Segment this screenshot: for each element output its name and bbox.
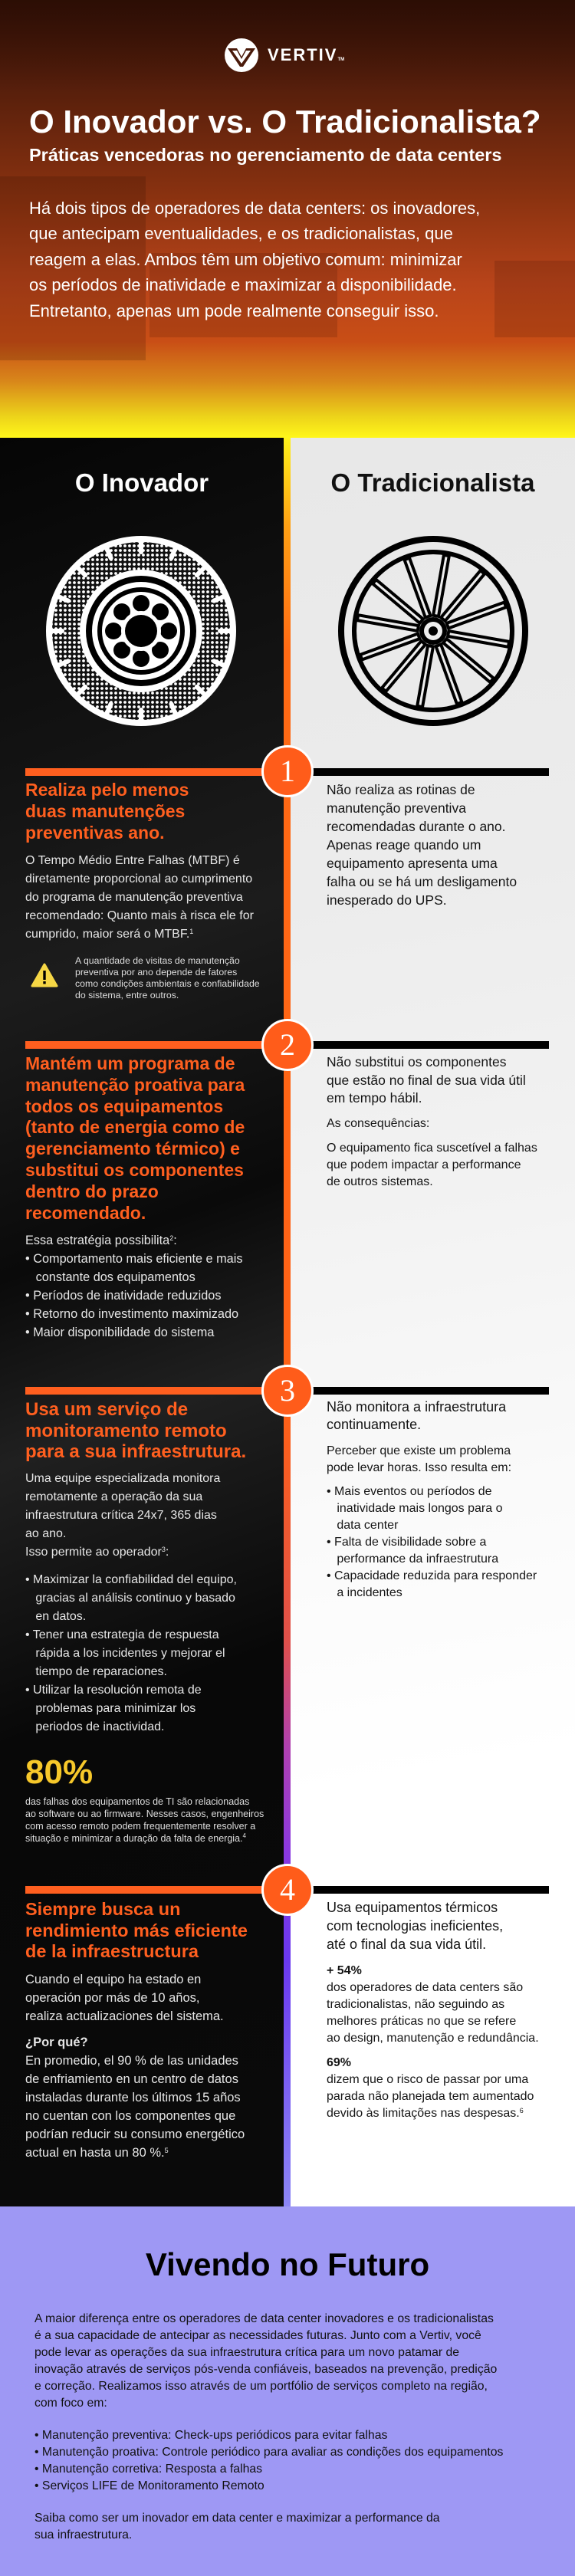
traditionalist text 1 <box>327 782 517 908</box>
heading: O Inovador: O Inovador <box>75 468 209 497</box>
server racks silhouettes <box>0 176 146 360</box>
stat text: ao software ou ao firmware. Nesses casos, engenheiros <box>25 1809 264 1819</box>
traditionalist text 2: O equipamento fica suscetível a falhas <box>327 1142 537 1155</box>
innovator text 2: constante dos equipamentos <box>36 1270 196 1284</box>
traditionalist stats 4: parada não planejada tem aumentado <box>327 2090 534 2103</box>
number badge 2 <box>261 1019 314 1071</box>
traditionalist heading 2: Não substitui os componentes <box>327 1054 506 1070</box>
innovator text 4: realiza actualizaciones del sistema. <box>25 2009 224 2023</box>
traditionalist bullets 3: inatividade mais longos para o <box>337 1502 502 1515</box>
traditionalist stats 4 <box>327 1964 539 2120</box>
innovator why text: ¿Por qué? <box>25 2036 88 2049</box>
innovator why text: no cuentan con los componentes que <box>25 2109 235 2123</box>
traditionalist text 1: equipamento apresenta uma <box>327 856 498 871</box>
innovator text 3: Isso permite ao operador3: <box>25 1546 169 1559</box>
traditionalist heading 3 <box>327 1399 506 1432</box>
traditionalist text 2 <box>327 1117 537 1188</box>
title: O Inovador vs. O Tradicionalista? <box>29 104 541 140</box>
logo: Vertiv <box>225 38 344 72</box>
traditionalist heading 4 <box>327 1900 503 1952</box>
innovator text 1: recomendado: Quanto mais à risca ele for <box>25 909 254 922</box>
warning note: preventiva por ano depende de fatores <box>75 967 237 978</box>
traditionalist bullets 3: • Capacidade reduzida para responder <box>327 1569 537 1582</box>
intro text <box>29 199 480 320</box>
innovator heading 4: de la infraestructura <box>25 1941 199 1961</box>
innovator heading 3: monitoramento remoto <box>25 1420 227 1441</box>
future paragraph: pode levar as operações da sua infraestrutura crítica para um novo patamar de <box>34 2346 459 2359</box>
traditionalist text 2: As consequências: <box>327 1117 429 1130</box>
innovator bullets 3 <box>25 1573 237 1733</box>
black rule 4 <box>307 1886 549 1894</box>
section 2 <box>25 1019 549 1071</box>
innovator text 3: infraestrutura crítica 24x7, 365 dias <box>25 1509 217 1522</box>
innovator why text: podrían reducir su consumo energético <box>25 2128 245 2141</box>
panel: traditionalist column background <box>291 438 575 2206</box>
number badge 4: 4 <box>280 1872 295 1907</box>
intro text: que antecipam eventualidades, e os tradicionalistas, que <box>29 224 453 243</box>
innovator text 1: diretamente proporcional ao cumprimento <box>25 872 252 886</box>
traditionalist heading 3: Não monitora a infraestrutura <box>327 1399 506 1414</box>
section 3 <box>25 1365 549 1417</box>
header background <box>0 0 575 438</box>
logo: Vertiv: VERTIVTM <box>268 45 344 64</box>
warning note: como condições ambientais e confiabilidade <box>75 978 260 989</box>
traditionalist heading 3: continuamente. <box>327 1417 421 1432</box>
traditionalist heading 2 <box>327 1054 526 1106</box>
innovator heading 4: rendimiento más eficiente <box>25 1920 248 1940</box>
intro text: Entretanto, apenas um pode realmente conseguir isso. <box>29 301 439 320</box>
warning note: A quantidade de visitas de manutenção <box>75 955 240 966</box>
black rule 3 <box>307 1387 549 1395</box>
innovator why text: de enfriamiento en un centro de datos <box>25 2072 238 2086</box>
innovator text 2 <box>25 1234 242 1339</box>
innovator text 2: • Retorno do investimento maximizado <box>25 1307 238 1321</box>
stat: 80%: 80% <box>25 1753 93 1791</box>
stat text: das falhas dos equipamentos de TI são relacionadas <box>25 1796 249 1807</box>
future bullets: • Manutenção proativa: Controle periódico para avaliar as condições dos equipamentos <box>34 2446 503 2459</box>
innovator heading 2: todos os equipamentos <box>25 1096 223 1116</box>
innovator bullets 3: en datos. <box>35 1610 86 1623</box>
traditionalist bullets 3 <box>327 1485 537 1599</box>
innovator bullets 3: • Maximizar la confiabilidad del equipo, <box>25 1573 237 1586</box>
heading: Vivendo no Futuro: Vivendo no Futuro <box>146 2246 429 2282</box>
traditionalist text 1: falha ou se há um desligamento <box>327 874 517 889</box>
traditionalist bullets 3: data center <box>337 1519 398 1532</box>
traditionalist stats 4: ao design, manutenção e redundância. <box>327 2032 539 2045</box>
innovator heading 2: recomendado. <box>25 1203 146 1223</box>
innovator heading 2: substitui os componentes <box>25 1160 244 1180</box>
innovator text 1 <box>25 854 254 941</box>
innovator heading 1: Realiza pelo menos <box>25 780 189 800</box>
innovator bullets 3: tiempo de reparaciones. <box>35 1665 167 1678</box>
icon: warning <box>31 963 58 987</box>
traditionalist text 3: Perceber que existe um problema <box>327 1444 511 1457</box>
number badge 4 <box>261 1864 314 1916</box>
warning note <box>75 955 260 1001</box>
innovator heading 3 <box>25 1399 246 1462</box>
closing text: Saiba como ser um inovador em data center e maximizar a performance da <box>34 2512 440 2525</box>
heading: O Tradicionalista: O Tradicionalista <box>331 468 534 497</box>
stat text: situação e minimizar a duração da falta de energia.4 <box>25 1832 246 1844</box>
innovator heading 2: dentro do prazo <box>25 1181 159 1201</box>
number badge 3 <box>261 1365 314 1417</box>
icon: modern tire <box>46 536 236 726</box>
innovator text 1: cumprido, maior será o MTBF.1 <box>25 928 193 941</box>
future paragraph: inovação através de serviços pós-venda confiáveis, baseados na prevenção, predição <box>34 2363 497 2376</box>
innovator text 3: remotamente a operação da sua <box>25 1490 202 1503</box>
innovator bullets 3: • Tener una estrategia de respuesta <box>25 1628 219 1641</box>
traditionalist text 1: inesperado do UPS. <box>327 892 447 908</box>
traditionalist stats 4: dos operadores de data centers são <box>327 1981 523 1994</box>
traditionalist heading 2: em tempo hábil. <box>327 1090 422 1106</box>
traditionalist text 3 <box>327 1444 511 1474</box>
innovator bullets 3: rápida a los incidentes y mejorar el <box>35 1647 225 1660</box>
subtitle: Práticas vencedoras no gerenciamento de data centers <box>29 145 501 165</box>
innovator text 4: operación por más de 10 años, <box>25 1991 199 2005</box>
traditionalist text 3: pode levar horas. Isso resulta em: <box>327 1461 511 1474</box>
future bullets: • Manutenção preventiva: Check-ups periódicos para evitar falhas <box>34 2429 387 2442</box>
orange rule 4 <box>25 1886 271 1894</box>
future bullets: • Manutenção corretiva: Resposta a falhas <box>34 2463 262 2476</box>
innovator heading 4 <box>25 1899 248 1961</box>
innovator text 2: • Maior disponibilidade do sistema <box>25 1326 214 1339</box>
innovator text 4 <box>25 1973 224 2023</box>
divider stripe <box>284 438 291 2206</box>
innovator heading 2: gerenciamento térmico) e <box>25 1138 240 1158</box>
innovator text 2: Essa estratégia possibilita2: <box>25 1234 177 1247</box>
traditionalist text 1: Apenas reage quando um <box>327 837 481 853</box>
innovator heading 2 <box>25 1053 245 1223</box>
innovator text 1: do programa de manutenção preventiva <box>25 891 243 904</box>
future paragraph: é a sua capacidade de antecipar as necessidades futuras. Junto com a Vertiv, você <box>34 2329 481 2342</box>
number badge 1 <box>261 745 314 797</box>
traditionalist heading 4: com tecnologias ineficientes, <box>327 1918 503 1934</box>
innovator why text: instaladas durante los últimos 15 años <box>25 2091 241 2104</box>
number badge 3: 3 <box>280 1373 295 1408</box>
future paragraph: com foco em: <box>34 2397 107 2410</box>
intro text: Há dois tipos de operadores de data centers: os inovadores, <box>29 199 480 218</box>
traditionalist text 2: que podem impactar a performance <box>327 1158 521 1171</box>
innovator heading 1: duas manutenções <box>25 801 185 821</box>
panel: Vivendo no Futuro <box>0 2206 575 2576</box>
stat text: com acesso remoto podem frequentemente resolver a <box>25 1821 255 1832</box>
traditionalist heading 4: até o final da sua vida útil. <box>327 1937 486 1952</box>
traditionalist stats 4: dizem que o risco de passar por uma <box>327 2073 528 2086</box>
future paragraph: A maior diferença entre os operadores de data center inovadores e os tradicionalistas <box>34 2312 494 2325</box>
traditionalist stats 4: tradicionalistas, não seguindo as <box>327 1998 504 2011</box>
future bullets <box>34 2429 503 2492</box>
traditionalist bullets 3: • Mais eventos ou períodos de <box>327 1485 492 1498</box>
innovator bullets 3: gracias al análisis continuo y basado <box>35 1592 235 1605</box>
section 4 <box>25 1864 549 1916</box>
future paragraph: e correção. Realizamos isso através de um portfólio de serviços completo na região, <box>34 2380 488 2393</box>
warning note: do sistema, entre outros. <box>75 990 179 1001</box>
innovator heading 2: Mantém um programa de <box>25 1053 235 1073</box>
traditionalist text 1: recomendadas durante o ano. <box>327 819 506 834</box>
innovator why text: En promedio, el 90 % de las unidades <box>25 2054 238 2068</box>
traditionalist stats 4: + 54% <box>327 1964 362 1977</box>
traditionalist stats 4: melhores práticas no que se refere <box>327 2015 516 2028</box>
orange rule 3 <box>25 1387 271 1395</box>
traditionalist bullets 3: • Falta de visibilidade sobre a <box>327 1536 486 1549</box>
innovator heading 3: Usa um serviço de <box>25 1399 188 1420</box>
innovator bullets 3: periodos de inactividad. <box>35 1720 164 1733</box>
traditionalist text 2: de outros sistemas. <box>327 1175 433 1188</box>
innovator heading 4: Siempre busca un <box>25 1899 180 1919</box>
innovator heading 1 <box>25 780 189 843</box>
panel: innovator column background <box>0 438 284 2206</box>
traditionalist stats 4: devido às limitações nas despesas.6 <box>327 2107 524 2120</box>
innovator text 3 <box>25 1472 221 1559</box>
traditionalist heading 2: que estão no final de sua vida útil <box>327 1072 526 1087</box>
innovator why text <box>25 2036 245 2160</box>
traditionalist text 1: Não realiza as rotinas de <box>327 782 475 797</box>
future bullets: • Serviços LIFE de Monitoramento Remoto <box>34 2479 264 2492</box>
innovator heading 2: manutenção proativa para <box>25 1075 245 1095</box>
innovator text 3: ao ano. <box>25 1527 66 1540</box>
traditionalist heading 4: Usa equipamentos térmicos <box>327 1900 498 1915</box>
intro text: os períodos de inatividade e maximizar a disponibilidade. <box>29 275 457 294</box>
innovator text 3: Uma equipe especializada monitora <box>25 1472 220 1485</box>
section 1 <box>25 745 549 797</box>
traditionalist stats 4: 69% <box>327 2056 351 2069</box>
traditionalist text 1: manutenção preventiva <box>327 800 466 816</box>
closing text <box>34 2512 440 2542</box>
innovator bullets 3: problemas para minimizar los <box>35 1702 196 1715</box>
future paragraph <box>34 2312 497 2410</box>
innovator text 1: O Tempo Médio Entre Falhas (MTBF) é <box>25 854 240 867</box>
stat text <box>25 1796 264 1844</box>
intro text: reagem a elas. Ambos têm um objetivo comum: minimizar <box>29 250 462 269</box>
black rule 1 <box>307 768 549 776</box>
traditionalist bullets 3: performance da infraestrutura <box>337 1552 498 1566</box>
innovator text 2: • Comportamento mais eficiente e mais <box>25 1252 242 1266</box>
black rule 2 <box>307 1041 549 1049</box>
innovator bullets 3: • Utilizar la resolución remota de <box>25 1684 202 1697</box>
icon: wagon wheel <box>338 536 528 726</box>
closing text: sua infraestrutura. <box>34 2528 132 2542</box>
innovator text 2: • Períodos de inatividade reduzidos <box>25 1289 222 1303</box>
number badge 1: 1 <box>280 754 295 788</box>
traditionalist bullets 3: a incidentes <box>337 1586 402 1599</box>
orange rule 1 <box>25 768 271 776</box>
innovator heading 1: preventivas ano. <box>25 823 165 843</box>
innovator heading 3: para a sua infraestrutura. <box>25 1441 246 1462</box>
number badge 2: 2 <box>280 1027 295 1062</box>
orange rule 2 <box>25 1041 271 1049</box>
innovator heading 2: (tanto de energia como de <box>25 1117 245 1137</box>
innovator text 4: Cuando el equipo ha estado en <box>25 1973 201 1986</box>
innovator why text: actual en hasta un 80 %.5 <box>25 2146 169 2160</box>
